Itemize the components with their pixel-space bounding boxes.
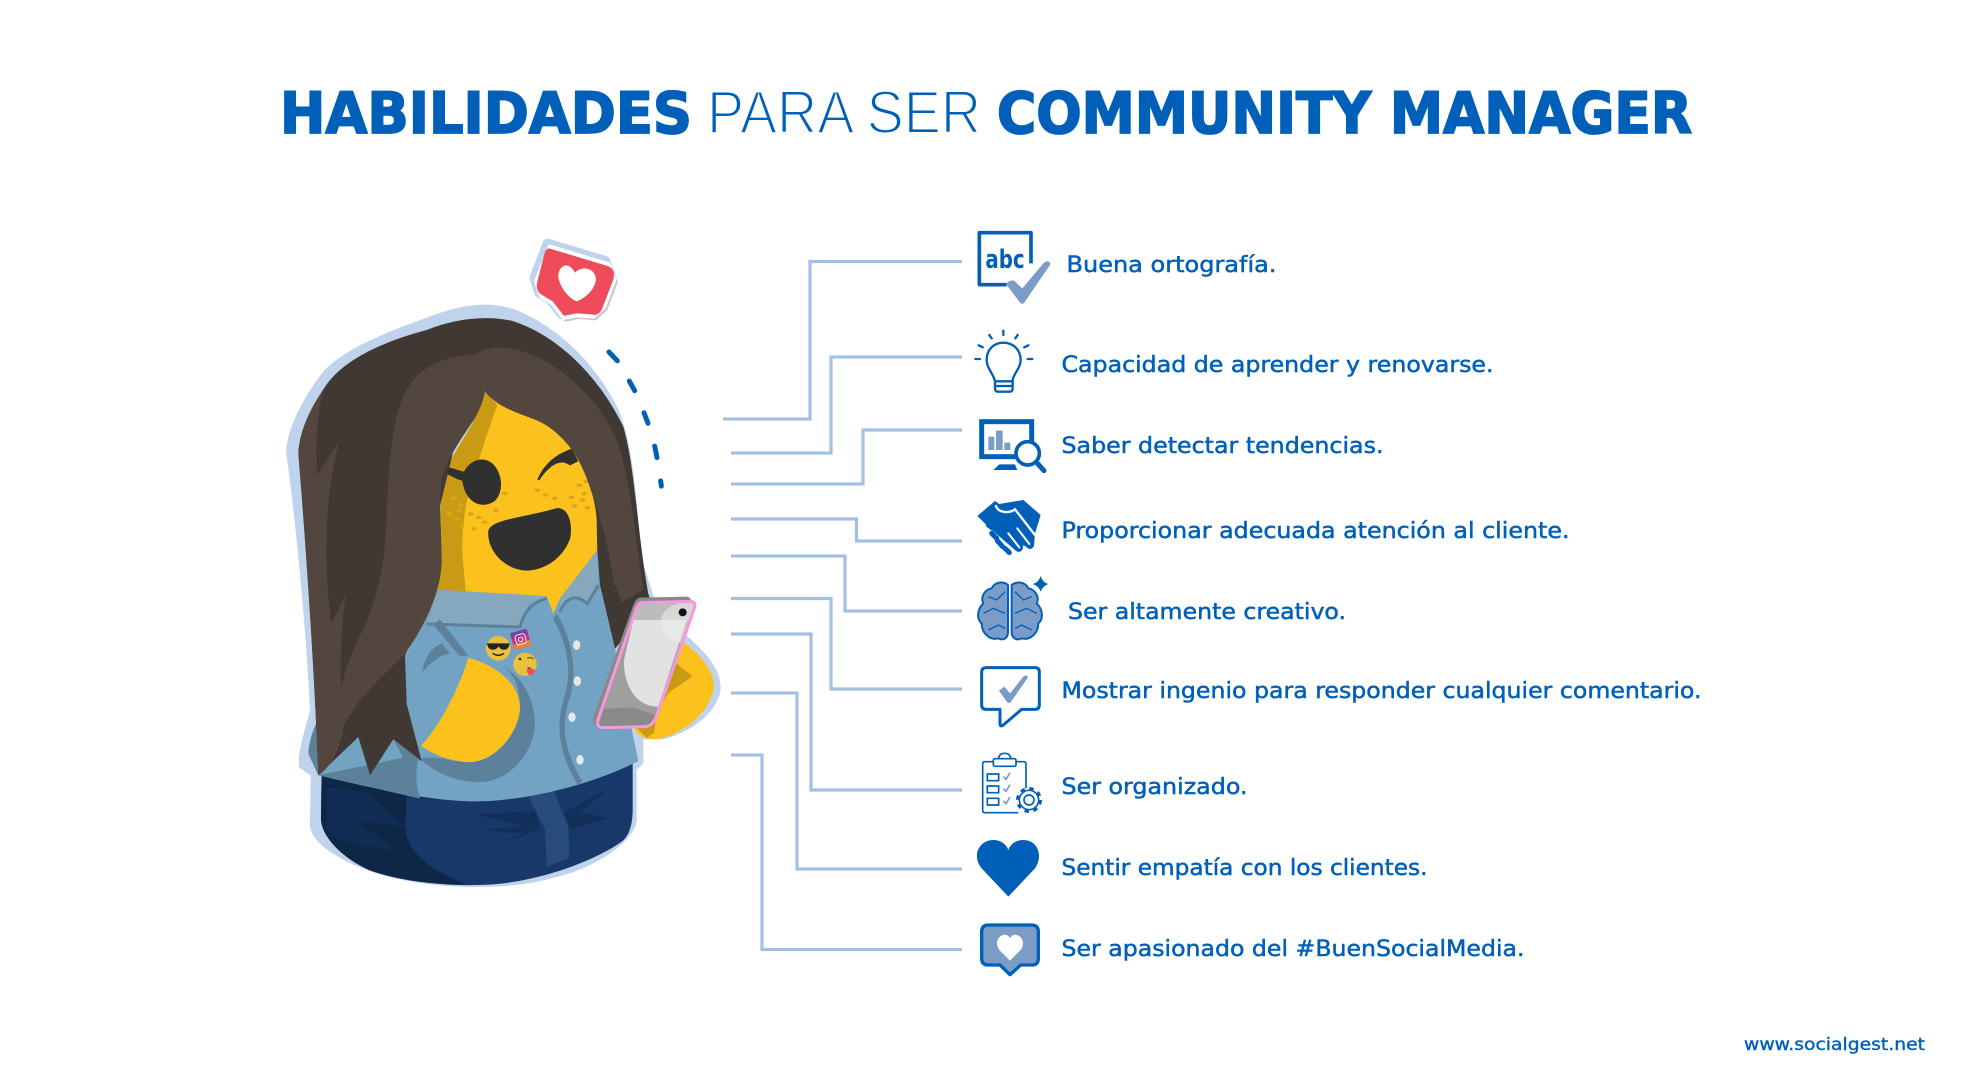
icon: brain with spark bbox=[978, 576, 1048, 639]
label: spelling: Buena ortografía. bbox=[1066, 253, 1276, 278]
icon: heart bbox=[977, 840, 1039, 897]
icon: heart notification bbox=[982, 925, 1038, 975]
icon: monitor with magnifier bbox=[982, 422, 1044, 471]
icon: speech bubble check bbox=[982, 668, 1039, 726]
label: wit: Mostrar ingenio para responder cualquier comentario. bbox=[1062, 679, 1702, 704]
title: PARA SER bbox=[707, 79, 981, 146]
title bbox=[280, 79, 1692, 147]
jeans bbox=[321, 763, 633, 885]
smartphone bbox=[592, 596, 696, 730]
label: organized: Ser organizado. bbox=[1062, 775, 1248, 800]
title: COMMUNITY MANAGER bbox=[997, 81, 1692, 147]
icon: abc spelling check bbox=[979, 233, 1051, 304]
shirt bbox=[308, 550, 638, 801]
sunglasses emoji bbox=[486, 636, 511, 661]
infographic canvas bbox=[284, 90, 1925, 1054]
label: empathy: Sentir empatía con los clientes. bbox=[1062, 856, 1428, 881]
label: learn: Capacidad de aprender y renovarse. bbox=[1062, 353, 1494, 378]
front hair bbox=[298, 318, 643, 775]
icon group lower bbox=[977, 668, 1040, 975]
icon group upper bbox=[975, 233, 1051, 639]
love notification badge bbox=[535, 245, 615, 319]
eye patch bbox=[445, 460, 501, 505]
skill labels bbox=[1062, 253, 1702, 962]
icon: light bulb bbox=[975, 331, 1032, 392]
face bbox=[437, 392, 597, 614]
icon: handshake bbox=[977, 500, 1041, 553]
freckles bbox=[447, 480, 590, 531]
website url: www.socialgest.net bbox=[1744, 1035, 1925, 1055]
title: HABILIDADES bbox=[280, 81, 692, 147]
shirt buttons bbox=[568, 640, 584, 765]
right hand bbox=[632, 642, 714, 739]
character outline halo bbox=[286, 305, 721, 887]
connector lines bbox=[723, 262, 962, 950]
pin badges bbox=[486, 629, 537, 676]
icon: abc spelling check: abc bbox=[985, 244, 1025, 274]
kiss emoji bbox=[513, 653, 537, 676]
icon: clipboard and gear bbox=[983, 753, 1040, 813]
label: creative: Ser altamente creativo. bbox=[1068, 600, 1346, 625]
instagram pin bbox=[510, 629, 531, 650]
label: trends: Saber detectar tendencias. bbox=[1062, 434, 1384, 459]
character illustration bbox=[286, 245, 721, 887]
mouth bbox=[488, 508, 571, 571]
label: customer care: Proporcionar adecuada atención al cliente. bbox=[1062, 519, 1570, 544]
back hair bbox=[460, 321, 652, 649]
label: passion: Ser apasionado del #BuenSocialMedia. bbox=[1062, 937, 1524, 962]
dashed arc bbox=[609, 352, 661, 486]
winking eye bbox=[537, 449, 578, 480]
arm hand bbox=[421, 658, 520, 762]
